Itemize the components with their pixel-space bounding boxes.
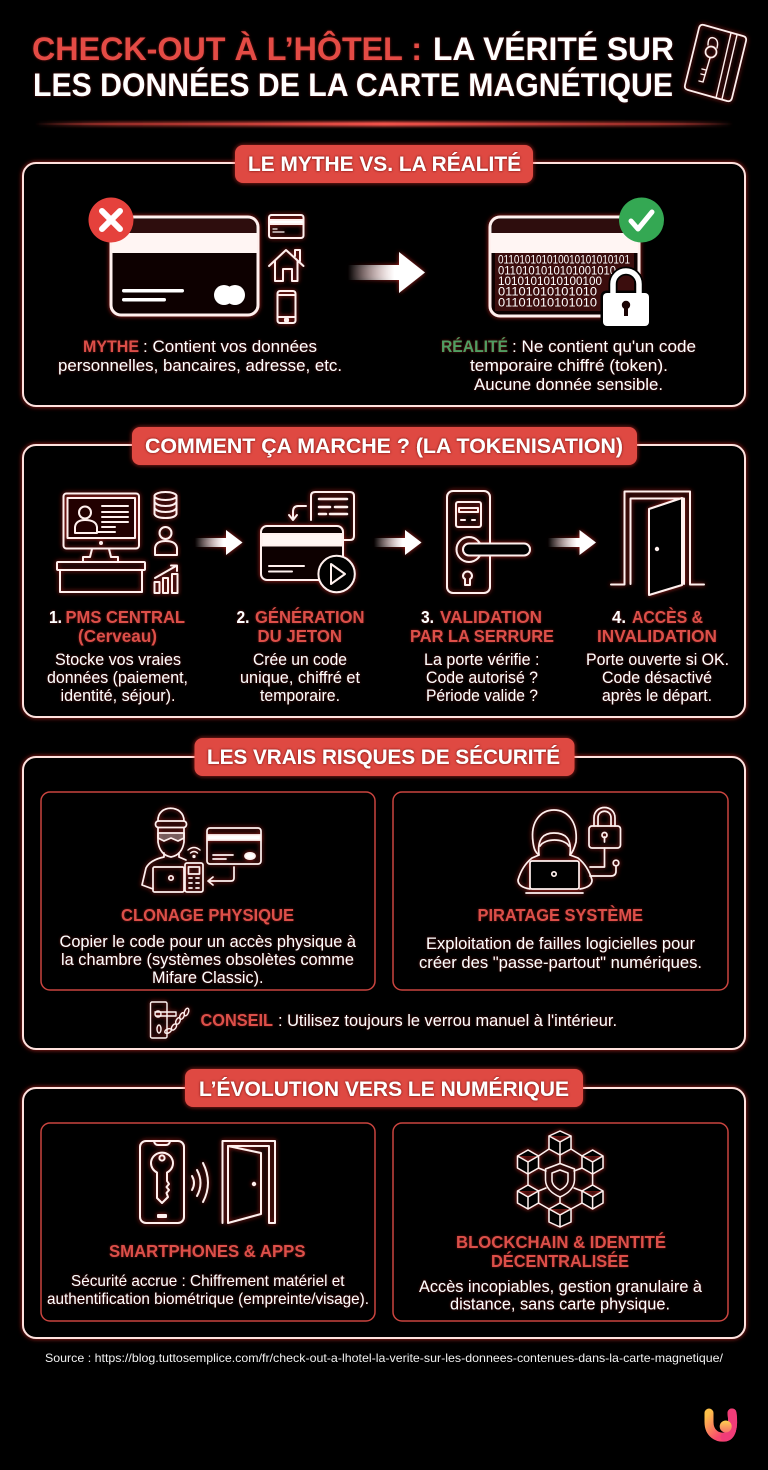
- icon: growth chart: [154, 566, 178, 593]
- step 1 text: données (paiement,: [47, 668, 188, 687]
- binary code: 01101010101010: [498, 298, 597, 310]
- heading: risques: [194, 738, 574, 776]
- piratage text: PIRATAGE SYSTÈME: [478, 904, 643, 925]
- reality text: RÉALITÉ: [441, 337, 508, 356]
- step 4 text: ACCÈS &: [632, 606, 703, 627]
- step 4 text: INVALIDATION: [597, 626, 717, 646]
- icon: pms computer: [57, 494, 145, 592]
- piratage text: Exploitation de failles logicielles pour: [426, 934, 695, 953]
- icon: phone: [278, 291, 296, 323]
- clonage text: Mifare Classic).: [152, 968, 264, 987]
- icon: padlock: [600, 271, 652, 328]
- step 3 text: PAR LA SERRURE: [410, 626, 554, 646]
- step 1 text: identité, séjour).: [60, 686, 176, 705]
- blockchain text: Accès incopiables, gestion granulaire à: [419, 1277, 703, 1296]
- step 2 text: Crée un code: [253, 650, 347, 669]
- icon: check badge: [619, 198, 664, 242]
- logo: [709, 1413, 733, 1437]
- step 2 text: unique, chiffré et: [240, 668, 360, 687]
- smartphones text: [47, 1241, 369, 1308]
- tip text: : Utilisez toujours le verrou manuel à l'intérieur.: [278, 1011, 617, 1030]
- clonage text: CLONAGE PHYSIQUE: [121, 905, 294, 925]
- binary code: 0110101010101001010: [498, 266, 616, 278]
- binary code: 011010101010010101010101: [498, 254, 630, 266]
- icon: small card: [269, 215, 304, 238]
- step 1 text: Stocke vos vraies: [55, 650, 181, 669]
- step 4 text: après le départ.: [602, 686, 712, 705]
- title: CHECK-OUT À L’HÔTEL :: [32, 31, 422, 67]
- icon: key card: [685, 25, 746, 101]
- arrow 1: [195, 530, 242, 555]
- panel: évolution numérique: [23, 1069, 745, 1338]
- card: clonage physique: [41, 792, 375, 990]
- binary code: 1010101010100100: [498, 276, 602, 288]
- heading: le mythe: [235, 145, 533, 183]
- smartphones text: authentification biométrique (empreinte/visage).: [47, 1291, 369, 1308]
- step 2 text: [236, 606, 364, 705]
- myth text: personnelles, bancaires, adresse, etc.: [58, 356, 342, 375]
- icon: thief cloning card: [142, 808, 261, 892]
- step 1 text: [47, 607, 188, 705]
- smartphones text: Sécurité accrue : Chiffrement matériel et: [71, 1273, 345, 1290]
- step 3 text: Période valide ?: [426, 686, 538, 705]
- step 2 text: GÉNÉRATION: [255, 606, 364, 627]
- step 1 text: 1.: [49, 607, 62, 627]
- clonage text: la chambre (systèmes obsolètes comme: [61, 950, 354, 969]
- reality text: temporaire chiffré (token).: [470, 356, 668, 375]
- step 4 text: Code désactivé: [602, 668, 712, 687]
- icon: cross badge: [88, 198, 134, 242]
- tip text: CONSEIL: [200, 1010, 273, 1030]
- icon: door lock: [447, 491, 530, 593]
- panel: comment ça marche: [23, 427, 745, 717]
- step 3 text: 3.: [421, 607, 434, 627]
- step 3 text: VALIDATION: [440, 607, 542, 627]
- icon: open door: [611, 492, 704, 595]
- arrow: [348, 252, 425, 293]
- step 1 text: (Cerveau): [78, 626, 157, 646]
- icon: token card: [261, 492, 355, 592]
- clonage text: [60, 905, 357, 987]
- myth text: [58, 337, 342, 375]
- step 4 text: 4.: [612, 607, 626, 627]
- step 3 text: [410, 607, 554, 705]
- icon: myth card: [111, 217, 258, 315]
- binary code: [498, 254, 630, 310]
- panel: vrais risques: [23, 738, 745, 1049]
- heading: tokenisation: COMMENT ÇA MARCHE ? (LA TOKENISATION): [145, 434, 623, 458]
- icon: blockchain shield: [518, 1131, 603, 1227]
- title: LA VÉRITÉ SUR: [433, 31, 674, 67]
- icon: hacker with lock: [518, 808, 620, 893]
- heading: évolution: [185, 1069, 583, 1107]
- step 2 text: DU JETON: [258, 626, 342, 646]
- divider: [35, 122, 733, 126]
- card: smartphones: [41, 1123, 375, 1321]
- icon: database: [154, 492, 176, 518]
- clonage text: Copier le code pour un accès physique à: [60, 932, 357, 951]
- step 3 text: La porte vérifie :: [424, 650, 540, 669]
- source: Source : https://blog.tuttosemplice.com/fr/check-out-a-lhotel-la-verite-sur-les-donnees-contenues-dans-la-carte-magnetique/: [45, 1351, 724, 1365]
- blockchain text: [419, 1231, 703, 1314]
- smartphones text: SMARTPHONES & APPS: [109, 1241, 306, 1261]
- icon: reality card: [490, 217, 639, 316]
- heading: le mythe: LE MYTHE VS. LA RÉALITÉ: [248, 151, 521, 176]
- step 4 text: Porte ouverte si OK.: [586, 650, 729, 669]
- card: piratage système: [393, 792, 728, 990]
- heading: tokenisation: [132, 427, 637, 465]
- arrow 3: [548, 530, 596, 555]
- blockchain text: DÉCENTRALISÉE: [491, 1250, 629, 1271]
- icon: house: [269, 250, 304, 281]
- step 1 text: PMS CENTRAL: [66, 607, 185, 627]
- icon: user: [155, 527, 177, 555]
- title: [32, 31, 674, 103]
- panel: le mythe vs la réalité: [23, 145, 745, 406]
- card: blockchain: [393, 1123, 728, 1321]
- blockchain text: BLOCKCHAIN & IDENTITÉ: [456, 1231, 666, 1252]
- reality text: Aucune donnée sensible.: [474, 375, 663, 394]
- icon: door chain: [150, 1002, 190, 1038]
- reality text: [441, 337, 696, 394]
- piratage text: créer des "passe-partout" numériques.: [419, 953, 702, 972]
- heading: évolution: L’ÉVOLUTION VERS LE NUMÉRIQUE: [199, 1076, 569, 1101]
- step 4 text: [586, 606, 729, 705]
- binary code: 01101010101010: [498, 286, 597, 298]
- title: LES DONNÉES DE LA CARTE MAGNÉTIQUE: [33, 67, 673, 103]
- arrow 2: [374, 530, 422, 555]
- myth text: MYTHE: [83, 337, 139, 356]
- heading: risques: LES VRAIS RISQUES DE SÉCURITÉ: [207, 744, 560, 769]
- icon: phone key and door: [140, 1141, 275, 1223]
- piratage text: [419, 904, 702, 972]
- step 3 text: Code autorisé ?: [426, 668, 538, 687]
- blockchain text: distance, sans carte physique.: [450, 1294, 670, 1314]
- step 2 text: 2.: [236, 607, 250, 627]
- step 2 text: temporaire.: [260, 686, 340, 705]
- myth text: : Contient vos données: [143, 337, 317, 356]
- reality text: : Ne contient qu'un code: [512, 337, 696, 356]
